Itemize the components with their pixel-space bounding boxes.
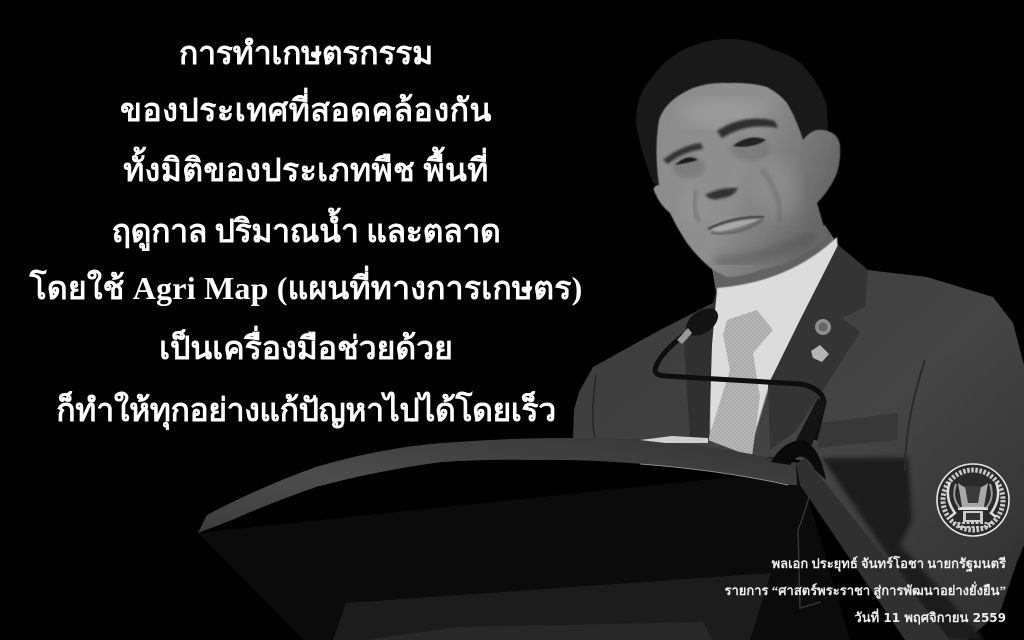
lectern: [198, 436, 950, 640]
quote line 4: ฤดูกาล ปริมาณน้ำ และตลาด: [112, 213, 500, 249]
broadcast date: วันที่ 11 พฤศจิกายน 2559: [854, 610, 1006, 625]
speaker name: พลเอก ประยุทธ์ จันทร์โอชา นายกรัฐมนตรี: [772, 556, 1006, 571]
quote text block: [29, 35, 582, 430]
facial features: [663, 119, 780, 233]
quote line 5: โดยใช้ Agri Map (แผนที่ทางการเกษตร): [30, 270, 582, 306]
quote line 3: ทั้งมิติของประเภทพืช พื้นที่: [123, 152, 489, 188]
quote line 7: ก็ทำให้ทุกอย่างแก้ปัญหาไปได้โดยเร็ว: [56, 392, 556, 428]
microphone: [655, 303, 826, 445]
necktie: [708, 310, 773, 457]
neck: [712, 225, 838, 300]
emblem: government seal: [937, 464, 1009, 536]
quote line 1: การทำเกษตรกรรม: [179, 35, 433, 71]
head and hair: [636, 39, 840, 277]
jacket lapels: [684, 245, 868, 450]
suit jacket: [573, 245, 1024, 640]
programme name: รายการ “ศาสตร์พระราชา สู่การพัฒนาอย่างยั่งยืน”: [724, 583, 1006, 598]
quote line 2: ของประเทศที่สอดคล้องกัน: [120, 92, 492, 128]
lapel pins: [811, 319, 831, 362]
caption: speaker, programme and date: [724, 556, 1006, 625]
quote line 6: เป็นเครื่องมือช่วยด้วย: [159, 330, 453, 366]
shirt collar: [710, 237, 838, 440]
